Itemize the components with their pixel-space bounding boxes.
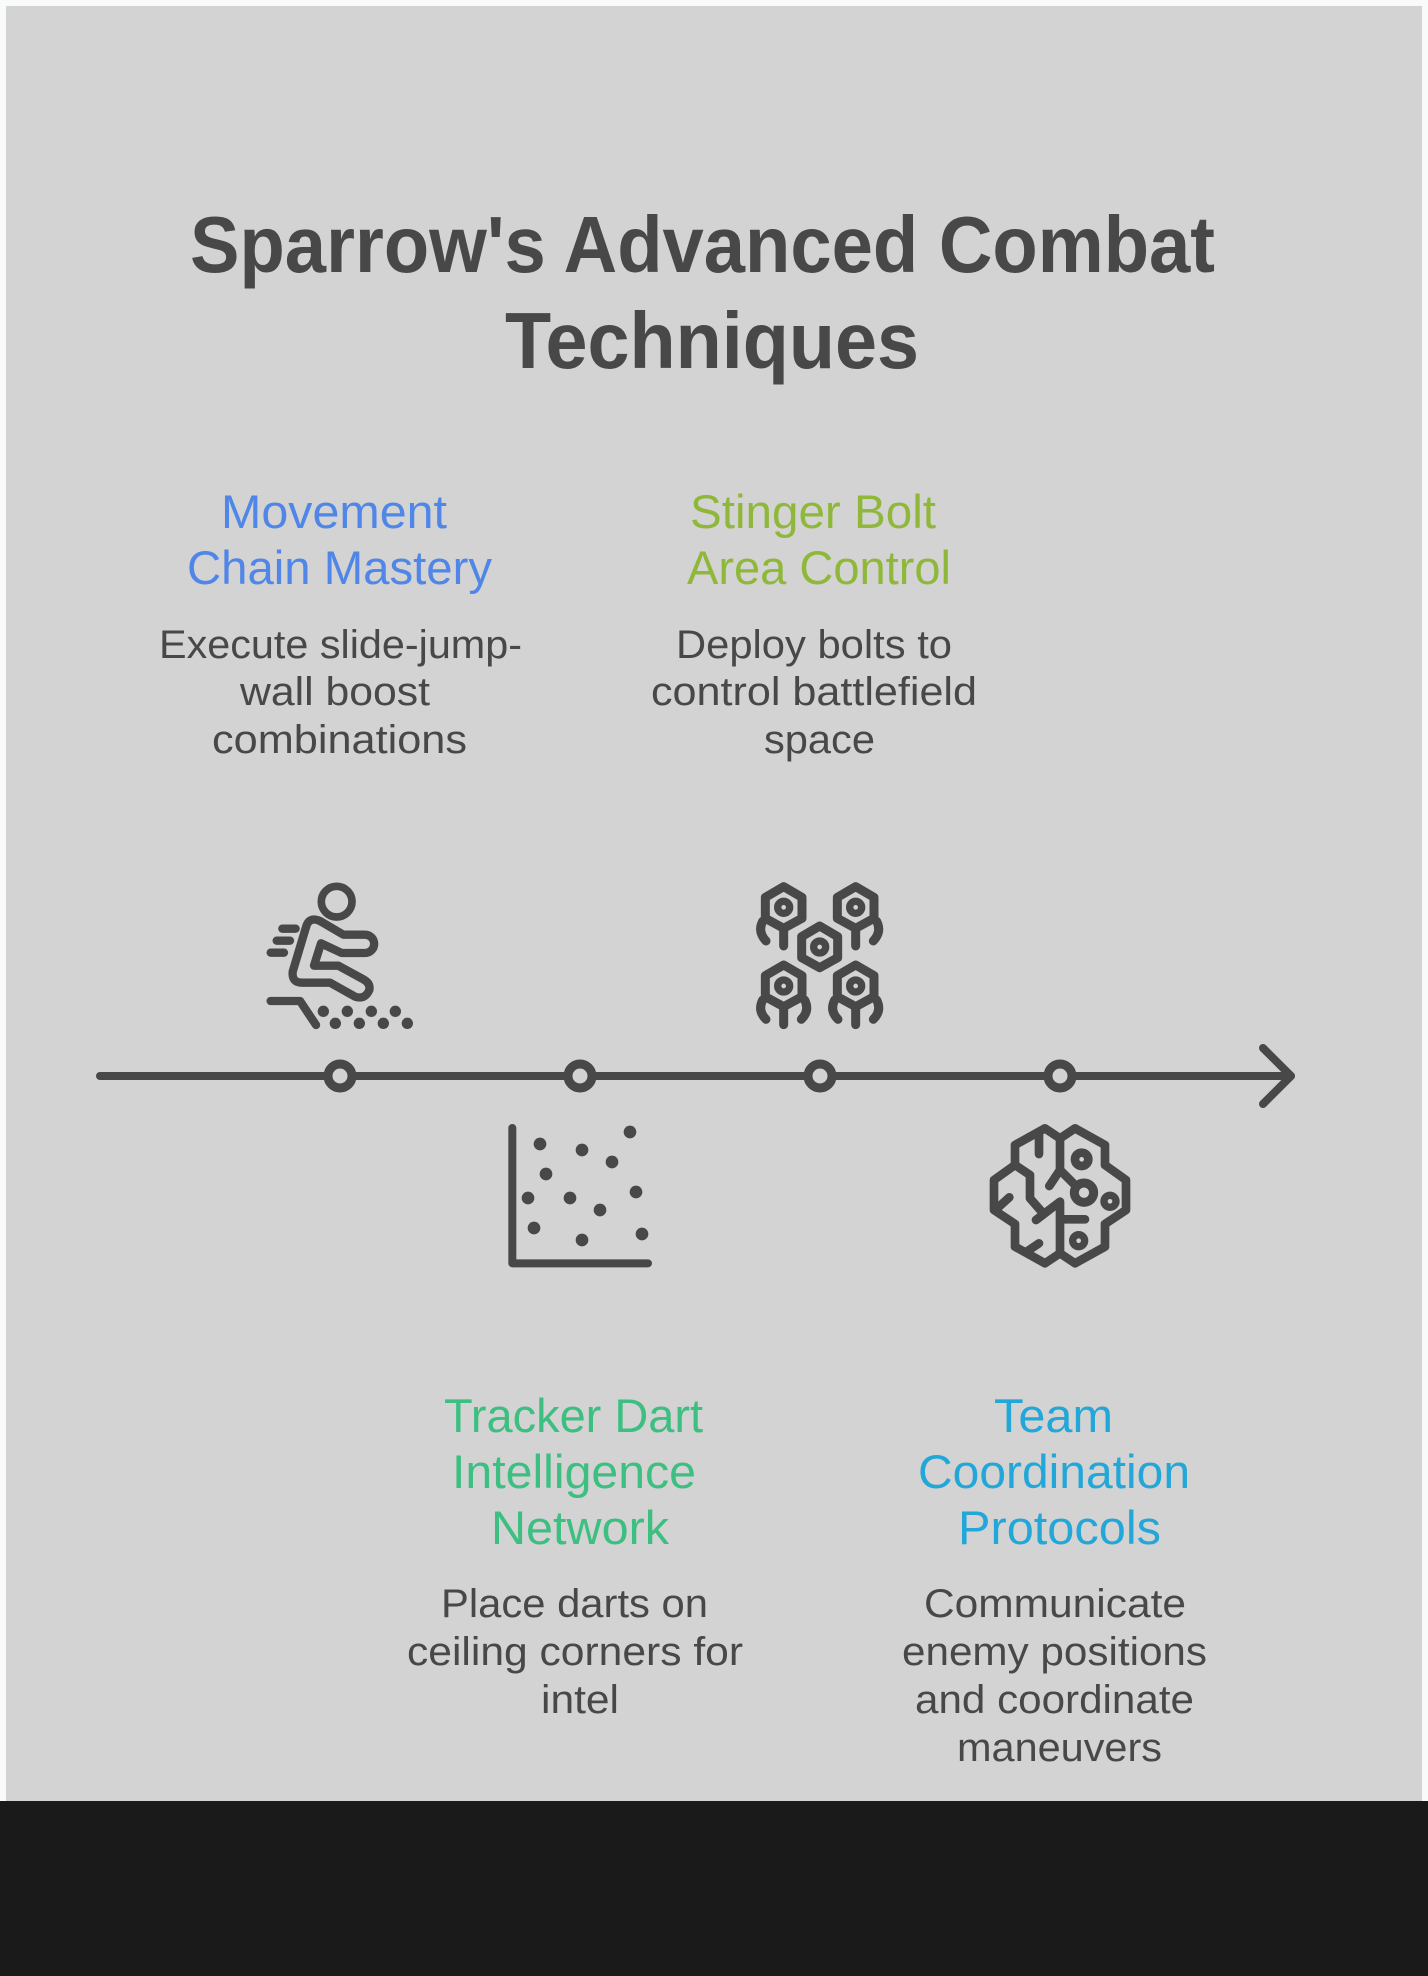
heading: Team Coordination Protocols: Coordination: [918, 1445, 1190, 1498]
text: Tracker Dart description: Place darts on: [441, 1582, 708, 1626]
text: Tracker Dart description: [407, 1582, 743, 1722]
heading: Team Coordination Protocols: Protocols: [958, 1501, 1161, 1554]
milestone 3: [808, 1064, 832, 1088]
heading: Stinger Bolt Area Control: Area Control: [687, 541, 951, 594]
title: Sparrow's Advanced Combat: [190, 200, 1215, 289]
text: Stinger Bolt description: Deploy bolts to: [676, 623, 952, 667]
heading: Team Coordination Protocols: Team: [994, 1389, 1113, 1442]
text: Team Coordination description: [902, 1582, 1207, 1770]
text: Team Coordination description: maneuvers: [957, 1726, 1162, 1770]
text: Movement description: Execute slide-jump-: [159, 623, 522, 667]
icon: hexagon bolt cluster: [761, 887, 879, 1025]
text: Stinger Bolt description: space: [764, 718, 875, 762]
title: Techniques: [505, 296, 919, 385]
text: Tracker Dart description: ceiling corners for: [407, 1630, 743, 1674]
text: Stinger Bolt description: control battlefield: [651, 670, 977, 714]
milestone 2: [568, 1064, 592, 1088]
text: Team Coordination description: Communicate: [924, 1582, 1186, 1626]
milestone 4: [1048, 1064, 1072, 1088]
heading: Tracker Dart Intelligence Network: Tracker Dart: [444, 1389, 703, 1442]
heading: Tracker Dart Intelligence Network: Intelligence: [452, 1445, 696, 1498]
heading: Stinger Bolt Area Control: Stinger Bolt: [690, 485, 936, 538]
text: Team Coordination description: enemy positions: [902, 1630, 1207, 1674]
timeline arrow: [100, 1048, 1291, 1104]
heading: Movement Chain Mastery: [187, 485, 493, 594]
heading: Team Coordination Protocols: [918, 1389, 1190, 1554]
icon: sliding runner: [271, 886, 413, 1029]
heading: Movement Chain Mastery: Movement: [221, 485, 447, 538]
text: Stinger Bolt description: [651, 623, 977, 762]
heading: Tracker Dart Intelligence Network: Network: [491, 1501, 670, 1554]
text: Team Coordination description: and coordinate: [915, 1678, 1194, 1722]
heading: Movement Chain Mastery: Chain Mastery: [187, 541, 493, 594]
heading: Stinger Bolt Area Control: [687, 485, 951, 594]
icon: scatter plot: [512, 1126, 648, 1263]
footer: black band: [0, 1801, 1428, 1976]
heading: Tracker Dart Intelligence Network: [444, 1389, 703, 1554]
icon: circuit brain: [994, 1128, 1126, 1263]
text: Tracker Dart description: intel: [541, 1678, 619, 1722]
title: [190, 200, 1215, 385]
text: Movement description: [159, 623, 522, 762]
text: Movement description: combinations: [212, 718, 467, 762]
text: Movement description: wall boost: [239, 670, 430, 714]
milestone 1: [328, 1064, 352, 1088]
